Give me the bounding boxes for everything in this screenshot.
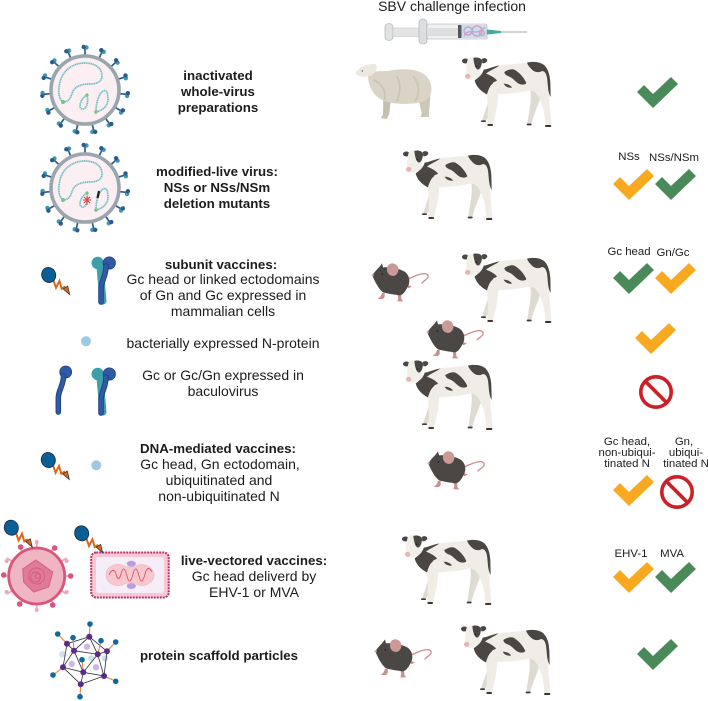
label: protein scaffold particles: protein scaffold particles xyxy=(140,648,298,663)
icon: MVA vector xyxy=(91,552,169,598)
icon: protein scaffold particle xyxy=(50,621,119,700)
label: subunit vaccines: of Gn and Gc expressed in xyxy=(140,287,306,303)
label: modified-live virus: NSs or NSs/NSm xyxy=(164,180,270,195)
icon: green check, inactivated xyxy=(637,77,678,108)
label: DNA-mediated vaccines xyxy=(140,441,300,504)
illustration: cow, inactivated row xyxy=(462,57,551,127)
outcome: DNA vaccines: Gn, xyxy=(675,436,693,448)
icon: deletion mutant virus xyxy=(40,143,130,233)
label: modified-live virus: modified-live virus: xyxy=(156,164,278,179)
icon: EHV-1 attached Gc head xyxy=(2,518,32,547)
outcome: NSs and NSs/NSm: NSs/NSm xyxy=(649,152,699,164)
label: subunit vaccines: Gc head or linked ectodomains xyxy=(126,271,320,287)
outcome: DNA vaccines xyxy=(598,436,708,507)
outcome: NSs and NSs/NSm xyxy=(613,151,699,200)
label: baculovirus expression: baculovirus xyxy=(188,383,258,399)
outcome: NSs and NSs/NSm: NSs xyxy=(618,151,640,163)
outcome: DNA vaccines: tinated N xyxy=(663,458,708,470)
icon: EHV-1 vector xyxy=(1,540,74,612)
label: inactivated whole-virus preparations: inactivated xyxy=(183,68,253,83)
icon: whole virus xyxy=(40,45,130,135)
illustration: mouse, bacterial row xyxy=(426,320,483,358)
outcome: EHV-1 and MVA: MVA xyxy=(660,548,684,560)
outcome: Gc head and Gn/Gc: Gc head xyxy=(607,246,651,258)
icon: Gn/Gc ectodomain pair xyxy=(92,257,116,302)
label: DNA-mediated vaccines: ubiquitinated and xyxy=(166,472,272,488)
icon: Gc single protein xyxy=(58,366,72,412)
illustration: cow, subunit row xyxy=(462,253,551,323)
icon: green check, scaffold xyxy=(637,639,678,670)
outcome: EHV-1 and MVA xyxy=(613,548,696,593)
label: DNA-mediated vaccines: DNA-mediated vaccines: xyxy=(140,441,296,456)
icon: MVA attached Gc head xyxy=(73,524,103,553)
icon: yellow check, bacterial xyxy=(635,323,676,354)
label: subunit vaccines: subunit vaccines: xyxy=(165,257,277,272)
label: DNA-mediated vaccines: Gc head, Gn ectodomain, xyxy=(140,456,300,472)
outcome: Gc head and Gn/Gc: Gn/Gc xyxy=(657,247,690,259)
label: subunit vaccines: mammalian cells xyxy=(171,303,275,319)
outcome: Gc head and Gn/Gc xyxy=(607,246,696,294)
label: baculovirus expression xyxy=(142,367,304,399)
label: modified-live virus xyxy=(156,164,278,211)
label: live-vectored vaccines: live-vectored vaccines: xyxy=(181,553,327,568)
label: inactivated whole-virus preparations: whole-virus xyxy=(180,84,255,99)
illustration: mouse, subunit row xyxy=(371,263,428,301)
label: modified-live virus: deletion mutants xyxy=(164,196,270,211)
icon: syringe xyxy=(385,19,527,44)
outcome: DNA vaccines: tinated N xyxy=(604,458,650,470)
label: inactivated whole-virus preparations xyxy=(178,68,258,115)
icon: Gc/Gn protein pair xyxy=(92,368,116,413)
outcome: DNA vaccines: ubiqui- xyxy=(669,447,703,459)
icon: DNA Gc head with linker xyxy=(39,450,69,480)
icon: Gc head with linker xyxy=(40,265,70,294)
label: bacterially expressed N-protein: bacterially expressed N-protein xyxy=(127,335,319,351)
label: live-vectored vaccines: EHV-1 or MVA xyxy=(209,584,300,600)
label: live-vectored vaccines: Gc head deliverd by xyxy=(192,568,316,584)
label: baculovirus expression: Gc or Gc/Gn expressed in xyxy=(142,367,304,383)
illustration: mouse, DNA row xyxy=(427,451,484,489)
illustration: cow, scaffold row xyxy=(461,625,550,695)
illustration: cow, live-vectored row xyxy=(402,535,491,605)
illustration: cow, baculovirus row xyxy=(403,360,492,430)
label: subunit vaccines xyxy=(126,257,320,319)
label: live-vectored vaccines xyxy=(181,553,327,600)
icon: DNA N-protein dot xyxy=(92,461,101,470)
icon: prohibited, baculovirus xyxy=(641,377,671,407)
illustration: sheep xyxy=(355,64,431,119)
illustration: mouse, scaffold row xyxy=(374,639,431,677)
outcome: EHV-1 and MVA: EHV-1 xyxy=(615,548,647,560)
icon: N-protein dot xyxy=(81,337,91,346)
outcome: DNA vaccines: non-ubiqui- xyxy=(598,447,656,459)
outcome: DNA vaccines: Gc head, xyxy=(604,436,650,448)
illustration: cow, modified-live row xyxy=(403,150,492,220)
label: DNA-mediated vaccines: non-ubiquitinated N xyxy=(158,488,280,504)
label: inactivated whole-virus preparations: preparations xyxy=(178,100,258,115)
